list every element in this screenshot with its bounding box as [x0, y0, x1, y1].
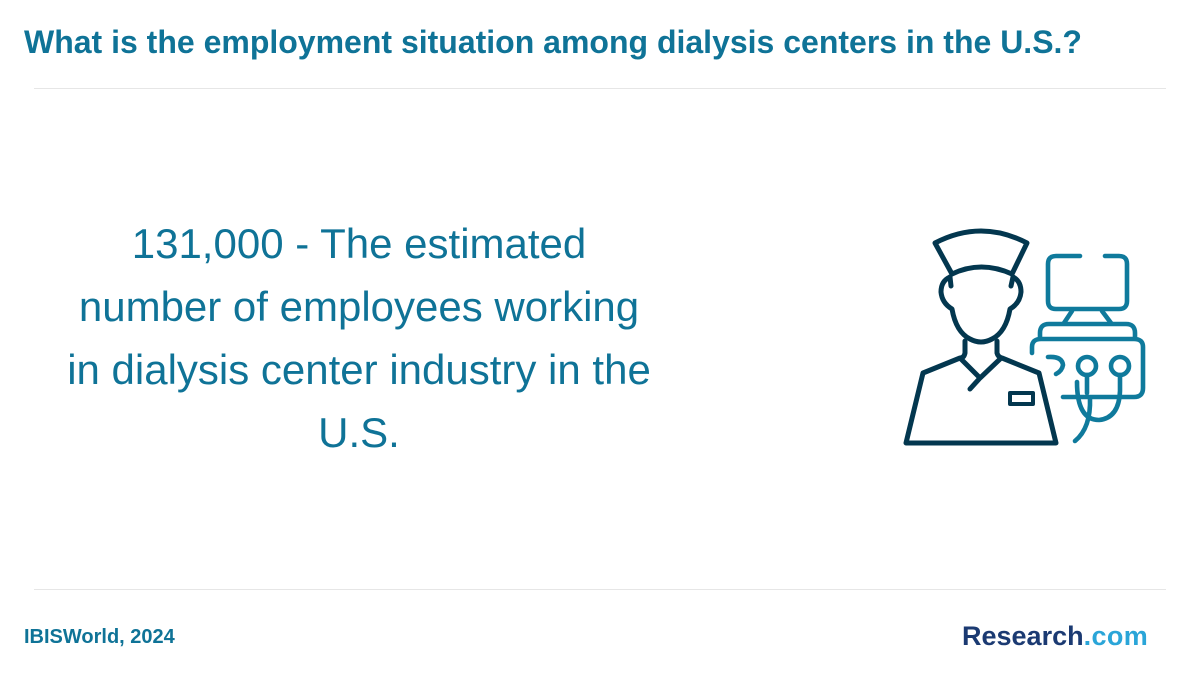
logo: Research.com: Research.com	[962, 621, 1148, 651]
main statistic text: U.S.	[318, 409, 400, 456]
main statistic text: in dialysis center industry in the	[67, 346, 651, 393]
icon: nurse	[906, 231, 1056, 443]
main statistic text	[67, 220, 651, 456]
main statistic text: 131,000 - The estimated	[132, 220, 586, 267]
source note: IBISWorld, 2024	[24, 626, 175, 648]
icon: dialysis machine	[1032, 256, 1143, 441]
main statistic text: number of employees working	[79, 283, 639, 330]
title: What is the employment situation among dialysis centers in the U.S.?	[24, 24, 1082, 60]
